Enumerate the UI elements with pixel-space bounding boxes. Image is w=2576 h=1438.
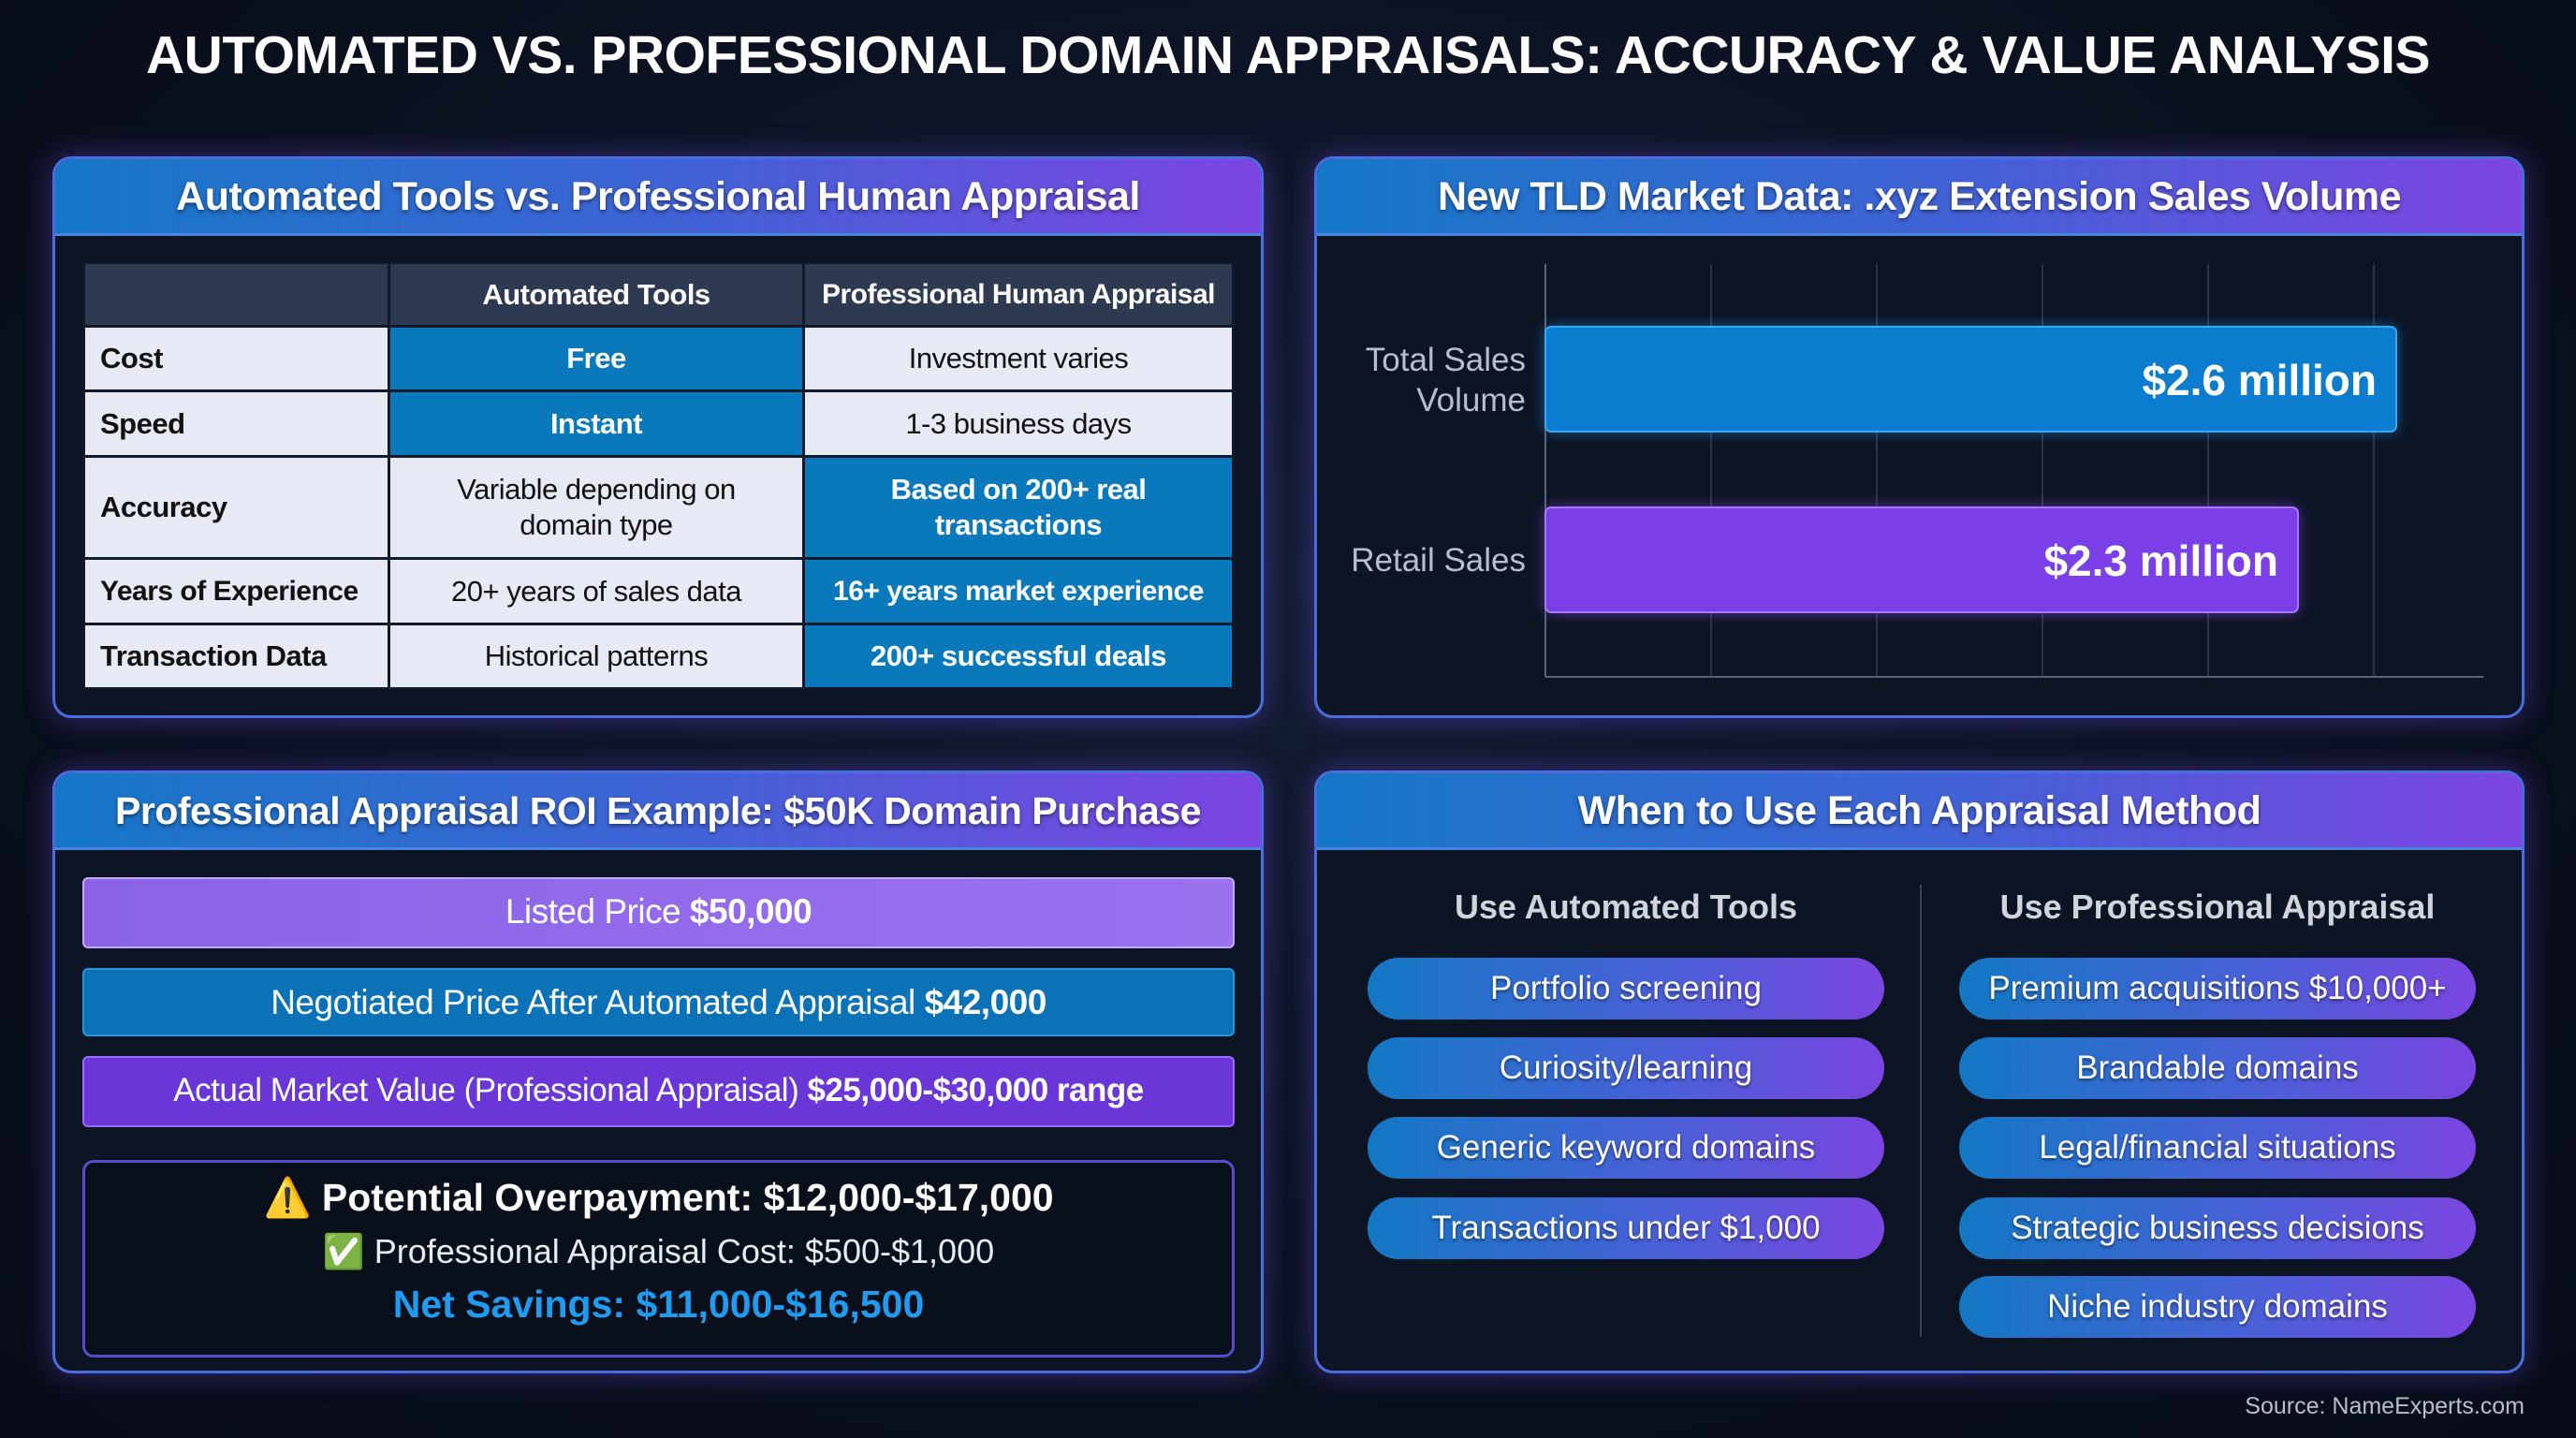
bar chart: Total Sales	[1366, 342, 1526, 378]
bar chart: $2.3 million	[2043, 536, 2278, 585]
heading: TLD: New TLD Market Data: .xyz Extension Sales Volume	[1438, 174, 2401, 219]
bar chart: Volume	[1416, 382, 1526, 418]
list: professional uses: Brandable domains	[2076, 1049, 2359, 1086]
callout: savings: Net Savings: $11,000-$16,500	[393, 1283, 924, 1326]
list: automated uses: Curiosity/learning	[1500, 1049, 1752, 1086]
heading: automated column: Use Automated Tools	[1455, 888, 1797, 926]
callout: savings	[82, 1160, 1235, 1357]
heading: ROI	[55, 773, 1261, 850]
panel: ROI example	[52, 770, 1264, 1373]
callout: savings: ✅ Professional Appraisal Cost: $500-$1,000	[323, 1232, 994, 1270]
heading: when to use: When to Use Each Appraisal Method	[1578, 788, 2261, 833]
table: 1-3 business days	[905, 406, 1132, 440]
table: 16+ years market experience	[833, 575, 1204, 607]
heading: professional column: Use Professional Appraisal	[2000, 888, 2435, 926]
bar chart: $2.6 million	[2142, 356, 2377, 404]
table: 200+ successful deals	[871, 639, 1166, 672]
table: Years of Experience	[100, 575, 359, 607]
panel: comparison table	[52, 156, 1264, 718]
bar: listed price: Listed Price $50,000	[505, 892, 812, 931]
bar: listed price	[82, 877, 1235, 948]
panel: when to use	[1314, 770, 2525, 1373]
list: professional uses: Niche industry domains	[2047, 1288, 2388, 1325]
panel: TLD market data	[1314, 156, 2525, 718]
bar: negotiated price: Negotiated Price After Automated Appraisal $42,000	[271, 983, 1046, 1021]
table: Automated Tools	[482, 277, 710, 311]
list: automated uses	[1368, 958, 1884, 1259]
list: professional uses: Legal/financial situations	[2039, 1129, 2396, 1166]
list: professional uses	[1959, 958, 2476, 1338]
heading: when to use	[1317, 773, 2522, 850]
bar chart	[1351, 264, 2483, 678]
table: Based on 200+ real	[891, 473, 1146, 506]
table	[85, 264, 1232, 687]
table: Investment varies	[909, 342, 1128, 374]
list: automated uses: Generic keyword domains	[1437, 1129, 1815, 1166]
heading: comparison: Automated Tools vs. Professional Human Appraisal	[176, 174, 1140, 219]
table: Accuracy	[100, 491, 227, 523]
table: Free	[566, 342, 626, 374]
heading: TLD	[1317, 159, 2522, 236]
bar chart: Retail Sales	[1351, 542, 1526, 579]
table: Historical patterns	[485, 639, 708, 672]
table: Variable depending on	[457, 473, 736, 506]
heading: ROI: Professional Appraisal ROI Example: $50K Domain Purchase	[115, 789, 1201, 832]
list: automated uses: Transactions under $1,000	[1431, 1210, 1821, 1246]
bar: actual market value	[82, 1056, 1235, 1127]
table: Transaction Data	[100, 639, 327, 672]
table: 20+ years of sales data	[451, 575, 741, 607]
table: Instant	[550, 406, 642, 440]
bar: actual market value: Actual Market Value (Professional Appraisal) $25,000-$30,000 range	[173, 1072, 1144, 1108]
heading: comparison	[55, 159, 1261, 236]
table: transactions	[935, 508, 1102, 541]
list: professional uses: Premium acquisitions $10,000+	[1988, 970, 2447, 1006]
source note: Source: NameExperts.com	[2245, 1393, 2525, 1419]
list: automated uses: Portfolio screening	[1490, 970, 1762, 1006]
table: domain type	[520, 508, 673, 541]
bar: negotiated price	[82, 968, 1235, 1036]
title: AUTOMATED VS. PROFESSIONAL DOMAIN APPRAISALS: ACCURACY & VALUE ANALYSIS	[146, 25, 2430, 85]
list: professional uses: Strategic business decisions	[2011, 1210, 2424, 1246]
callout: savings: ⚠️ Potential Overpayment: $12,000-$17,000	[263, 1176, 1054, 1219]
table: Speed	[100, 406, 185, 440]
table: Cost	[100, 342, 163, 374]
table: Professional Human Appraisal	[822, 279, 1215, 309]
